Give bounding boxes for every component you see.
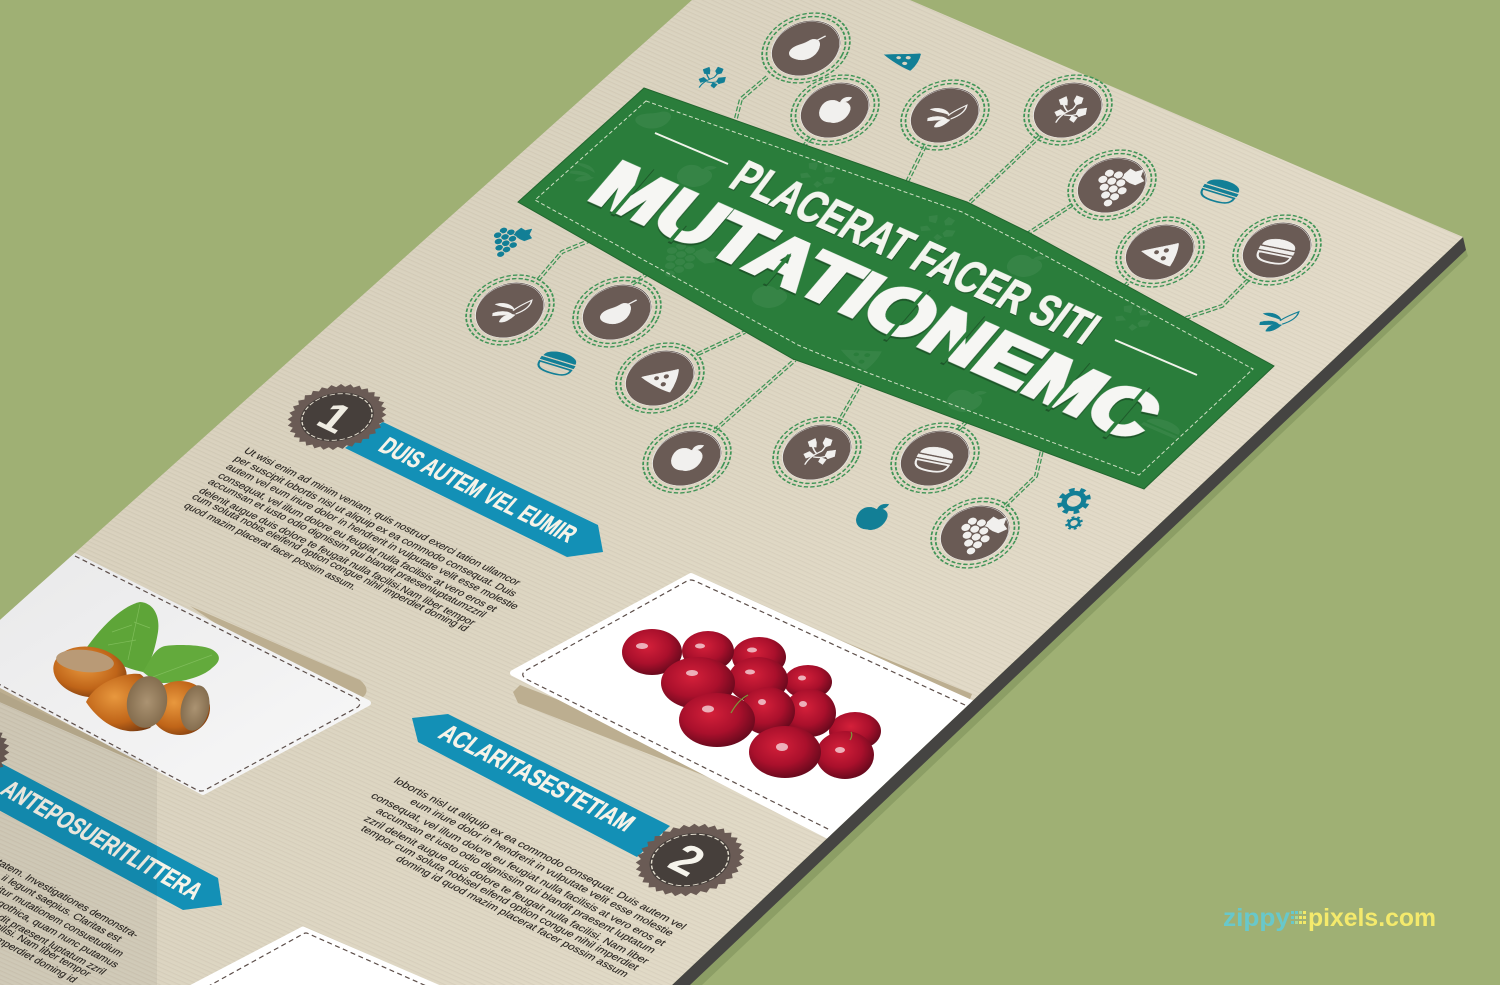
- badge 1: [267, 372, 407, 462]
- text block 2: [358, 777, 688, 980]
- title line one: PLACERAT FACER SITI: [720, 152, 1109, 354]
- text block 2: zzril delenit augue duis dolore te feugait nulla facilisi. Nam liber: [361, 815, 651, 967]
- text block 1: [181, 447, 523, 634]
- watermark dots: [1291, 911, 1306, 924]
- banner rule left: [655, 133, 728, 164]
- node: pear lower: [559, 270, 675, 354]
- node: herb: [1010, 68, 1126, 152]
- icon: teal burger: [1197, 176, 1244, 206]
- ribbon 3 heading: ANTEPOSUERITLITTERA: [0, 775, 209, 905]
- text block 1: accumsan et iusto odio dignissim qui blandit praesenluptatumzzril: [205, 478, 488, 620]
- paper soft shadow: [690, 250, 1468, 985]
- text block 2: eum iriure dolor in hendrerit in vulputate velit esse molestie: [407, 798, 676, 938]
- number 2: 2: [659, 834, 716, 885]
- text block 1: per suscipit lobortis nisl ut aliquip ex ea commodo consequat. Duis: [231, 455, 519, 599]
- photo card 3 (cropped): [190, 929, 440, 985]
- watermark zippy word: zippy: [1223, 904, 1290, 932]
- ribbon 2 heading: ACLARITASESTETIAM: [433, 719, 641, 836]
- icon: teal grapes: [482, 222, 537, 262]
- icon: teal apple: [852, 500, 894, 532]
- photo card 1: hazelnuts: [0, 556, 368, 792]
- icon: large gear: [1055, 487, 1093, 515]
- banner stitching: [535, 101, 1253, 475]
- ribbon 1: [345, 422, 603, 557]
- paper fold shade: [0, 692, 157, 985]
- paper dark edge: [672, 237, 1466, 985]
- badge 2: [613, 810, 767, 910]
- node: banana lower: [452, 268, 568, 352]
- node: burger: [1219, 208, 1335, 292]
- panel: title banner: [518, 88, 1274, 489]
- text block 2: tempor cum soluta nobisel eifend option congue nihil imperdiet: [358, 825, 641, 973]
- card 3 dashed outline: [207, 933, 440, 985]
- badge 3 (cropped): [0, 705, 32, 805]
- icon: teal burger lower: [534, 348, 581, 378]
- text block 1: autem vel eum iriure dolor in hendrerit in vulputate velit esse molestie: [223, 463, 521, 612]
- card 1 white panel: [0, 556, 368, 792]
- hazelnut photo: [49, 602, 219, 735]
- text block 2: accumsan et iusto odio dignissim qui blandit praesent luptatum: [373, 807, 658, 956]
- icon: teal herb: [693, 64, 732, 92]
- banner rule right: [1115, 340, 1197, 375]
- node: burger lower: [877, 416, 993, 500]
- node: banana: [887, 73, 1003, 157]
- ribbon 2: [412, 714, 670, 857]
- text block 1: delenit augue duis dolore te feugait nulla facilisi.Nam liber tempor: [196, 487, 478, 628]
- card 2 white panel: [513, 576, 980, 842]
- photo card 2: red plums: [513, 576, 980, 842]
- text block 2: doming id quod mazim placerat facer possim assum: [393, 855, 631, 980]
- card 2 tan backing: [513, 638, 972, 779]
- text block 1: cum soluta nobis eleifend option congue nihil imperdiet doming id: [189, 493, 471, 634]
- node: pizza: [1102, 210, 1218, 294]
- node: grapes: [1054, 143, 1170, 227]
- number 1: 1: [307, 394, 361, 442]
- node: apple: [777, 68, 893, 152]
- card 1 dashed outline: [0, 556, 360, 791]
- text block 2: consequat, vel illum dolore eu feugiat nulla facilisis at vero eros et: [368, 792, 668, 948]
- watermark: zippypixels.com: [1223, 904, 1436, 932]
- banner ghost icons: [563, 101, 1186, 448]
- text block 3: [0, 858, 141, 985]
- title line two stencil: MUTATIONEMC: [576, 149, 1176, 454]
- text block 1: quod mazim placerat facer possim assum.: [181, 502, 359, 592]
- ribbon 1 heading: DUIS AUTEM VEL EUMIR: [373, 432, 584, 547]
- plums photo: [622, 629, 881, 779]
- text block 1: Ut wisi enim ad minim veniam, quis nostrud exerci tation ullamcor: [241, 447, 523, 588]
- icon: teal banana: [1254, 304, 1299, 336]
- card 3 white panel: [190, 929, 440, 985]
- text block 1: consequat, vel illum dolore eu feugiat nulla facilisis at vero eros et: [215, 472, 499, 614]
- node: grapes lower: [917, 491, 1033, 575]
- text block 3: ii legunt saepius. Claritas est: [0, 874, 124, 944]
- node: apple lower: [629, 416, 745, 500]
- node: pizza lower: [602, 336, 718, 420]
- banner shape: [518, 88, 1274, 489]
- node: pear: [748, 6, 864, 90]
- connector lines: [538, 77, 1248, 506]
- card 1 tan backing: [0, 606, 367, 768]
- node: herb lower: [759, 410, 875, 494]
- icon: small gear: [1064, 516, 1084, 530]
- ribbon 3: [0, 760, 222, 910]
- icon: teal pizza: [879, 45, 923, 70]
- card 2 dashed outline: [523, 580, 965, 830]
- watermark pixels word: pixels.com: [1308, 904, 1436, 932]
- text block 2: lobortis nisl ut aliquip ex ea commodo consequat. Duis autem vel: [391, 777, 688, 932]
